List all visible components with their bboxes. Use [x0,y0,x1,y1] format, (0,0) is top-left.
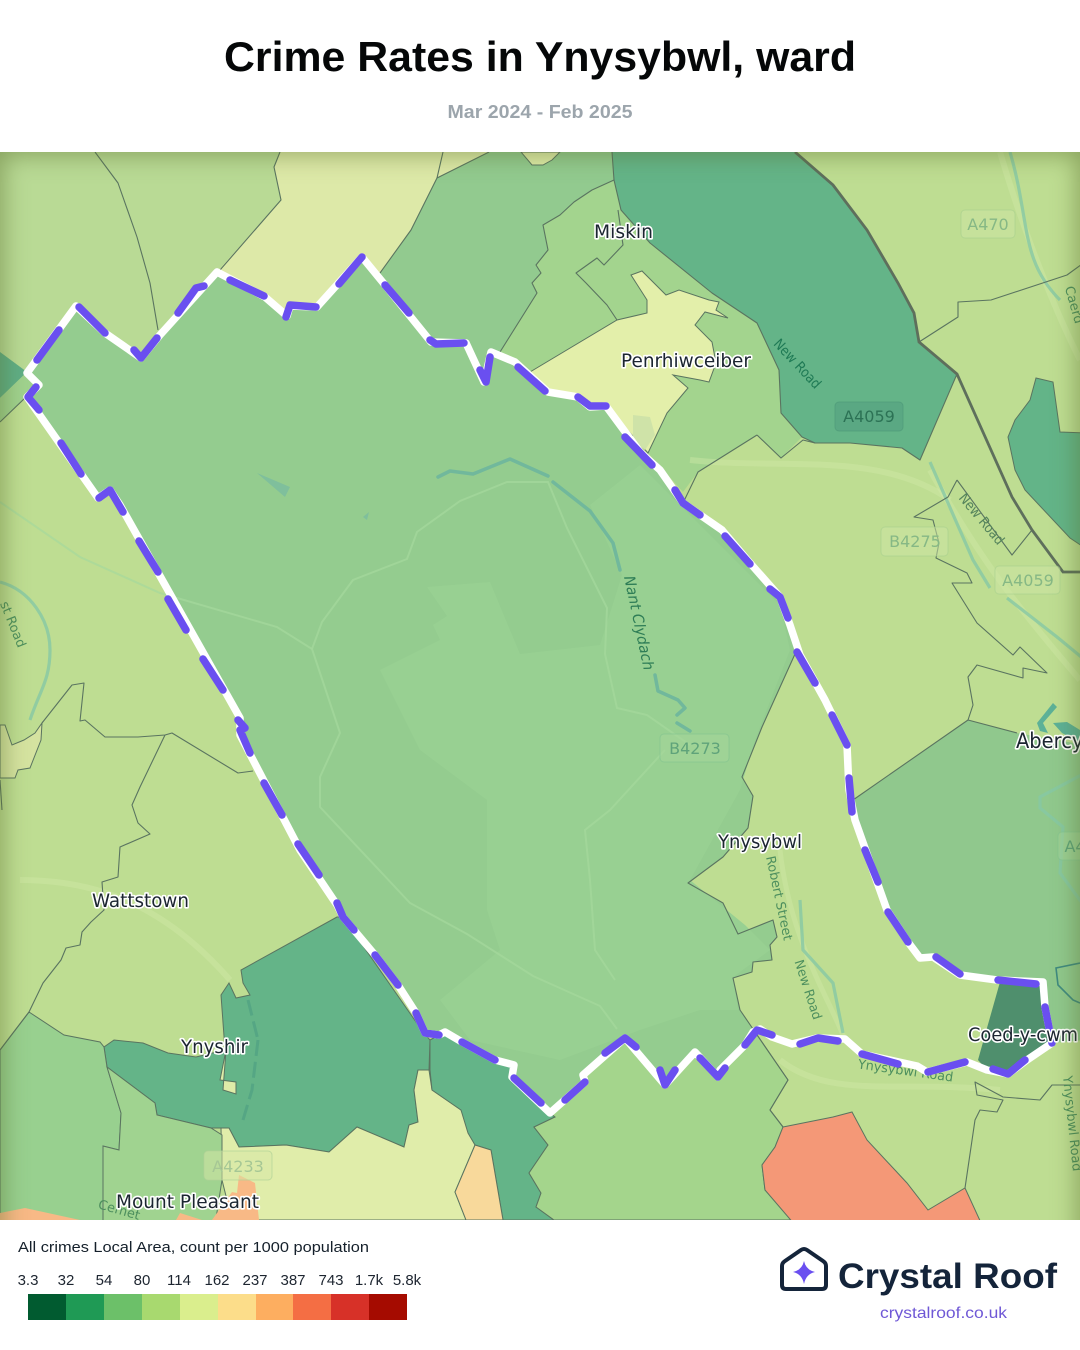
area: ward tarn [257,473,369,520]
road and river names: New Road [791,958,824,1022]
legend labels: 743 [318,1272,344,1289]
legend labels: 32 [58,1272,74,1289]
road and river names: Cemet [96,1198,142,1224]
area: Penrhiwceiber school patch [633,415,655,450]
area: Ynyshir dark green [104,917,430,1152]
area: Ynyshir pale inset [220,1050,236,1094]
area: east medium green [853,720,1080,1043]
road and river names: New Road [955,491,1007,548]
legend colour scale [28,1294,407,1320]
legend labels: 162 [204,1272,230,1289]
area: salmon high crime [762,1112,982,1225]
area: north pale yellow [217,152,489,316]
area: Ynyshir stream [243,1000,258,1120]
place names: Mount Pleasant [116,1191,259,1213]
valley roads and field edges [20,152,1080,1090]
subtitle: date range: Mar 2024 - Feb 2025 [448,102,632,122]
area: west teal sliver [0,352,27,398]
area: south medium green [529,1029,795,1220]
area: dark green hillside north [612,152,957,460]
icon: house with star [782,1249,826,1289]
area: Coed-y-cwm very dark green [978,984,1048,1070]
river: lower dark channel [1056,963,1080,1003]
area: Penrhiwceiber pale yellow [530,271,728,453]
logo: Crystal Roof [782,1249,1057,1322]
legend [18,1239,422,1320]
place names: Ynyshir [180,1036,248,1058]
legend title: All crimes Local Area, count per 1000 population [18,1239,369,1256]
area: south-west medium green [0,1012,121,1225]
legend labels: 80 [134,1272,150,1289]
legend labels: 387 [280,1272,306,1289]
place names: Ynysybwl [717,831,802,853]
road shields: B4273 [669,739,721,758]
road shields: B4275 [889,532,941,551]
area: west pale pocket [0,723,42,778]
legend labels [18,1272,422,1289]
place names [92,221,1080,1213]
ward boundary [27,257,1052,1113]
ward tracks [0,482,690,1029]
area: west medium strip [0,376,33,421]
road and river names: Ynysybwl Road [856,1057,954,1086]
wordmark: Crystal Roof [838,1257,1057,1296]
area: Mount Pleasant medium green [103,1067,222,1225]
area: Miskin east medium green [500,180,802,492]
area: eastern dark green [1008,378,1080,548]
place names: Miskin [594,221,653,243]
title: Crime Rates in Ynysybwl, ward [224,33,856,80]
road and river names: Nant Clydach [620,574,658,672]
area: ward central lighter fields [689,764,749,934]
legend labels: 54 [96,1272,112,1289]
legend labels: 114 [167,1272,191,1289]
rivers: east and west valleys [0,152,1080,1033]
river: Nant Clydach [438,459,690,731]
road and river names [0,285,1080,1224]
legend labels: 3.3 [18,1272,38,1289]
road shields: A4059 [1002,571,1054,590]
road shields: A4233 [212,1157,264,1176]
area: peach patches [212,1175,259,1220]
legend labels: 5.8k [393,1272,422,1289]
road and river names: New Road [770,336,824,392]
road shields [204,210,1080,1180]
place names: Wattstown [92,890,189,912]
area: top pale patch [521,152,560,165]
place names: Penrhiwceiber [621,350,751,372]
road and river names: Robert Street [762,855,795,942]
area: north-west fields [0,152,281,373]
road shields: A4059 [843,407,895,426]
area: tan patch [455,1145,503,1220]
legend labels: 1.7k [355,1272,384,1289]
area: Miskin west medium green [380,152,614,382]
area: south pale yellow [221,1070,475,1220]
boundary lines [0,152,1080,1188]
legend labels: 237 [242,1272,268,1289]
road shields: A470 [967,215,1009,234]
choropleth map [0,152,1080,1225]
area: ward main [27,257,795,1113]
website: crystalroof.co.uk [880,1305,1008,1322]
area: south dark green [430,1032,555,1220]
Aberc pond [1037,703,1080,745]
